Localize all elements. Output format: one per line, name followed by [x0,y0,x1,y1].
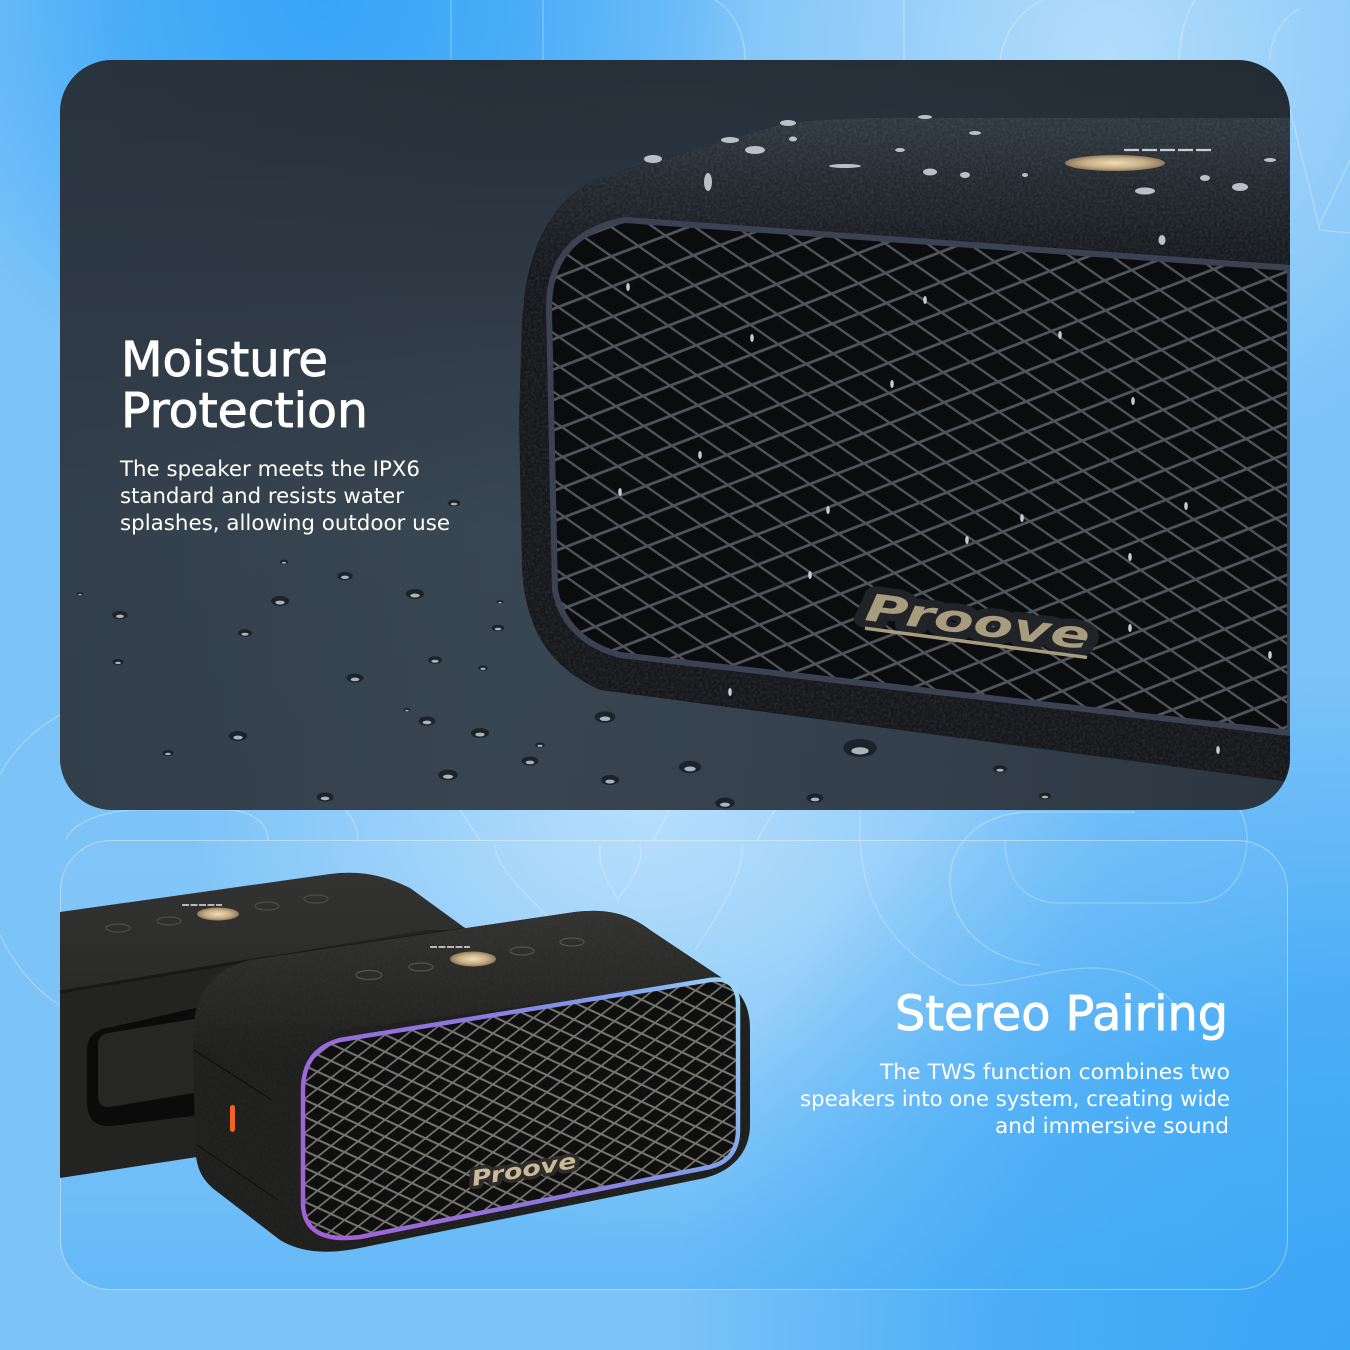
brand badge [863,585,1093,658]
speaker metal mesh grille [549,220,1290,733]
rear speaker top face [60,873,465,993]
front speaker brand badge: Proove [470,1149,578,1191]
text: stereo pairing description: The TWS function combines two [879,1060,1230,1084]
panel ghost lettering [495,810,1247,1010]
front speaker body [193,911,750,1252]
speaker body [519,118,1290,782]
orange charging indicator [230,1105,235,1132]
speaker: waterproof unit [519,115,1290,782]
front speaker gold button [450,952,496,966]
rear speaker indicator dashes [182,904,222,906]
speaker textured top face [524,118,1290,310]
text: moisture protection description: standard and resists water [120,484,404,508]
heading: moisture protection: Protection [121,383,368,439]
speaker texture grain [519,118,1290,782]
front speaker top face [193,911,725,1085]
rear speaker [60,873,465,1178]
rear speaker recessed panel [87,1007,200,1126]
heading: stereo pairing: Stereo Pairing [895,986,1228,1042]
water drops on grille [618,283,1272,754]
panel: stereo pairing [60,810,1288,1290]
brand badge: Proove [863,585,1093,658]
front speaker LED-lit mesh grille [303,980,738,1238]
text: stereo pairing description: and immersive sound [995,1114,1229,1138]
text: stereo pairing description: speakers into one system, creating wide [800,1087,1230,1111]
background ghost lettering [0,0,1350,1005]
rear speaker gold button [197,908,239,920]
rear speaker end cap [60,930,465,1178]
front speaker indicator dashes [430,946,470,948]
front speaker grain [193,911,750,1252]
status indicator dashes [1124,149,1212,151]
droplets on the surface [76,500,1051,808]
panel background [60,840,1288,1290]
rear speaker passive radiator [98,1018,200,1107]
water drops on speaker [644,115,1276,245]
front speaker touch buttons [356,938,584,980]
text: moisture protection description: The speaker meets the IPX6 [119,457,420,481]
rear speaker seam shadow [60,929,465,992]
heading: moisture protection [125,339,364,428]
text: moisture protection description: splashes, allowing outdoor use [120,511,450,535]
heading: moisture protection: Moisture [121,332,328,388]
panel background: wet surface [60,60,1290,810]
rear speaker touch buttons [106,895,328,932]
text: stereo pairing description [800,1060,1230,1138]
gold power button [1065,155,1165,171]
panel: moisture protection [60,60,1290,810]
text: moisture protection description [119,457,450,535]
front speaker [193,911,750,1252]
front speaker seam [194,1050,278,1200]
